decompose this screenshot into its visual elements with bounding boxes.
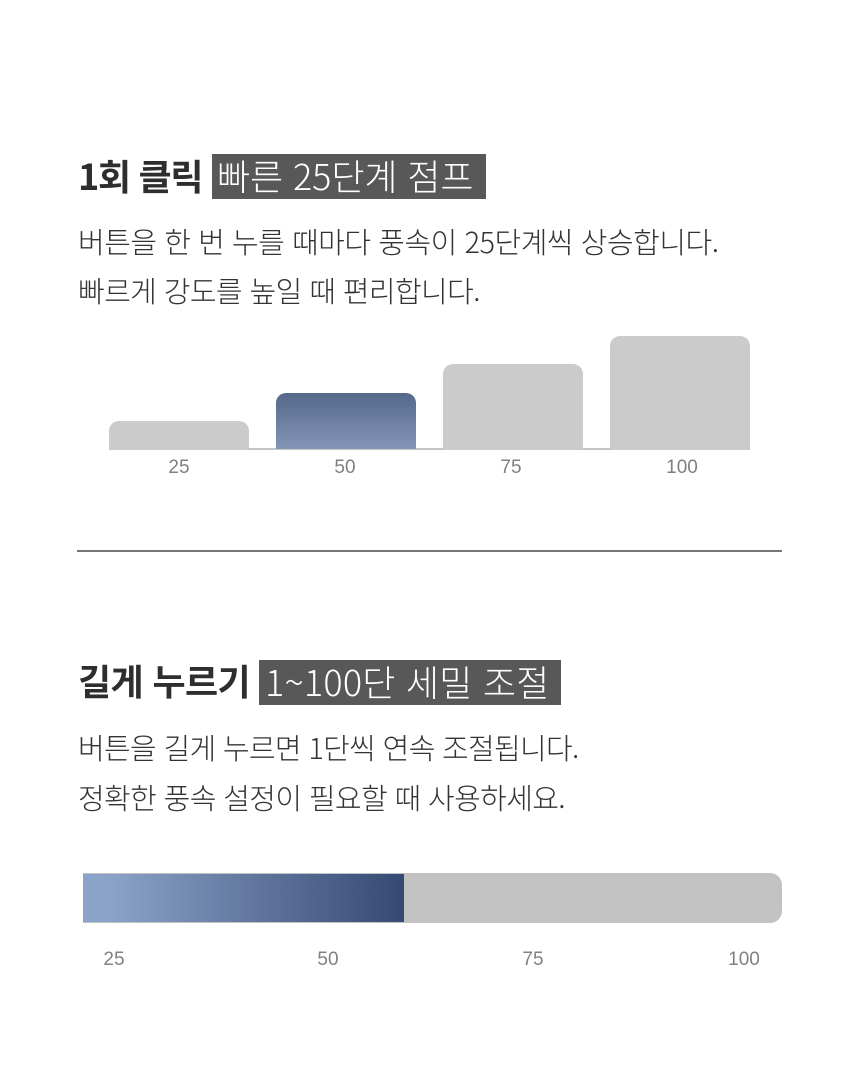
heading: long press: 길게 누르기 [78,654,250,706]
label 75: 75 [500,457,522,478]
label 75: 75 [522,949,544,970]
label 50: 50 [334,457,356,478]
slider fill [83,874,404,922]
badge text: 빠른 25단계 점프 [217,149,473,201]
description text: 버튼을 길게 누르면 1단씩 연속 조절됩니다. [78,726,579,768]
chart baseline [109,448,750,450]
label 50: 50 [317,949,339,970]
heading badge: fine adjustment [259,660,561,705]
label 25: 25 [168,457,190,478]
bar chart: 25 step levels [109,336,750,478]
label 25: 25 [103,949,125,970]
description text: 버튼을 한 번 누를 때마다 풍속이 25단계씩 상승합니다. [78,220,719,262]
panel: long press [78,654,782,970]
label 100: 100 [666,457,698,478]
bar 100 [610,336,750,450]
description text [78,220,719,311]
section divider [77,550,782,552]
description text [78,726,579,818]
label 100: 100 [728,949,760,970]
bar 75 [443,364,583,450]
description text: 빠르게 강도를 높일 때 편리합니다. [78,269,480,311]
description text: 정확한 풍속 설정이 필요할 때 사용하세요. [78,776,565,818]
bar 50 active [276,393,416,449]
bar 25 [109,421,249,450]
heading: single click: 1회 클릭 [78,149,202,201]
slider track [83,873,782,923]
badge text: 1~100단 세밀 조절 [265,655,549,707]
panel: single click [78,149,750,478]
slider chart [83,873,782,970]
heading badge: fast 25 step jump [212,154,486,199]
